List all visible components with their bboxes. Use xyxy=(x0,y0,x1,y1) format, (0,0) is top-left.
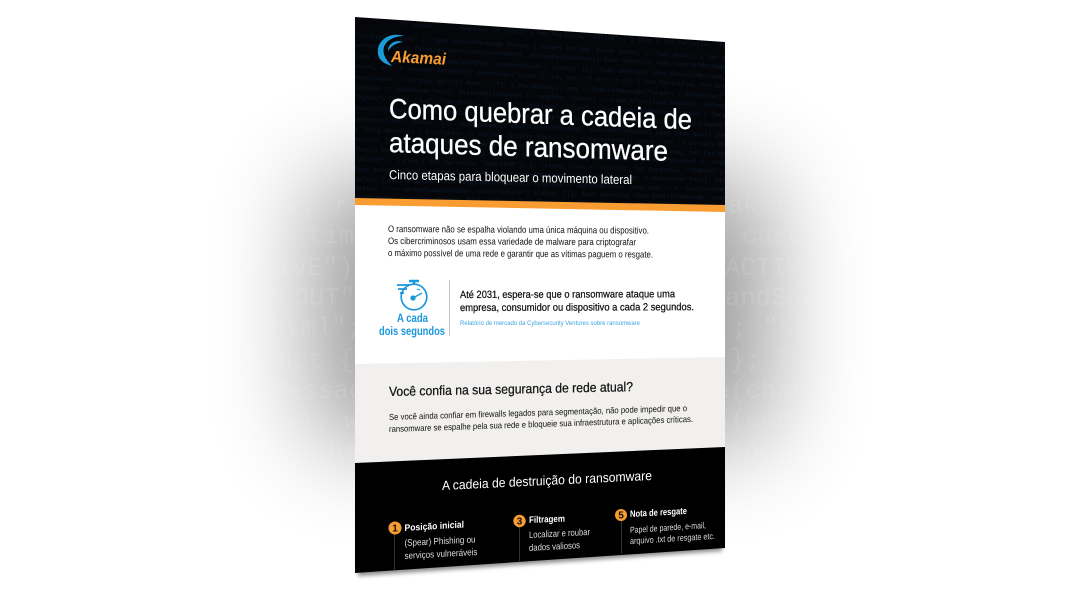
icon: stopwatch xyxy=(397,281,427,310)
background: oversized code text: andServ xyxy=(725,284,833,313)
step 1 xyxy=(388,518,478,570)
stat label: A cada xyxy=(397,312,428,325)
step 3: Filtragem xyxy=(529,513,565,525)
header code texture: "bytes"; "fmt"; "log"; "net/http"; "strconv"; "strings"; "time" ); type ControlMessage struct { Target string; Count int64; }; func main() { for { select { case respChan := xyxy=(355,94,994,132)
background: oversized code text: , r xyxy=(303,192,349,221)
background: oversized code text: Cha xyxy=(313,437,359,466)
background: oversized code text: time xyxy=(308,222,369,251)
step 3: dados valiosos xyxy=(529,539,580,553)
panel: black header xyxy=(355,17,725,206)
step 3: Localizar e roubar xyxy=(529,526,590,540)
background: oversized code text: ror xyxy=(309,161,355,190)
header code texture: hostTokens := strings.Split(r.Host, ":"); r.ParseForm(); count, err := strconv.ParseInt(r.FormValue("count"), 10, 64); if err != nil { workerActive = status; xyxy=(355,194,938,215)
background: oversized code text: CTIVE") xyxy=(246,254,354,283)
header code texture: select { case respChan := <- statusPollChannel: respChan <- workerActive; case msg := <- controlChannel: workerActive = true; go doStuff(msg, workerCompleteChan); func admin(cc ch xyxy=(355,176,1020,202)
background: oversized code text: l); w xyxy=(283,407,360,436)
stat text xyxy=(460,289,694,314)
question heading: Você confia na sua segurança de rede atual? xyxy=(389,379,633,399)
title: Como quebrar a cadeia de xyxy=(389,93,692,135)
step 5: arquivo .txt de resgate etc. xyxy=(630,531,715,546)
header code texture: count, err := strconv.ParseInt(r.FormValue("count"), 10, 64); if err != nil { fmt.Fprintf(w, err.Error()); return; }; http.HandleFunc("/status",func(w xyxy=(355,63,912,100)
header code texture: reqChan := make(chan bool); statusPollChannel <- reqChan; timeout := time.After(time.Second); select { fmt.Fprint(w, "ACTIVE"); } else { fmt.Fprint(w, "INACTIVE"); }; xyxy=(355,84,971,122)
step 3: 3 xyxy=(517,516,523,528)
panel: black kill chain section xyxy=(355,447,725,573)
background: oversized code text: e(chan xyxy=(715,377,807,406)
header code texture: if result := <- reqChan; if result { fmt.Fprint(w, "ACTIVE"); } else { fmt.Fprint(w, "INACTIVE"); }; return; xyxy=(400,21,801,54)
background: blurred shadow behind document xyxy=(315,180,767,440)
title xyxy=(389,93,692,167)
background: oversized code text: ake( xyxy=(728,192,789,221)
step 1: 1 xyxy=(392,524,398,534)
question paragraph xyxy=(389,403,693,434)
logo: Akamai xyxy=(378,35,446,69)
stat label xyxy=(379,312,445,338)
intro paragraph: o máximo possível de uma rede e garantir que as vítimas paguem o resgate. xyxy=(388,247,653,260)
panel: white intro section xyxy=(355,198,725,366)
kill chain heading: A cadeia de destruição do ransomware xyxy=(442,468,652,493)
logo: Akamai: Akamai xyxy=(390,48,446,69)
document page xyxy=(355,17,725,573)
step 1: serviços vulneráveis xyxy=(404,546,478,561)
header code texture: hostTokens := strings.Split(r.Host, ":"); r.ParseForm(); msg := ControlMessage{Target: r.FormValue("target"), Count: count}; }); http.HandleFunc("/status",func(w xyxy=(355,74,953,112)
header code texture: workerActive := false;go admin(controlChannel, statusPollChannel); func admin(cc chan ControlMessage, statusPollChannel chan chan bool) { xyxy=(355,42,864,78)
question paragraph: ransomware se espalhe pela sua rede e bloqueie sua infraestrutura e aplicações críticas. xyxy=(389,414,693,434)
background: oversized code text: Messag xyxy=(272,377,364,406)
question paragraph: Se você ainda confiar em firewalls legados para segmentação, não pode impedir que o xyxy=(389,403,687,422)
source note: Relatório de mercado da Cybersecurity Ventures sobre ransomware xyxy=(460,320,640,327)
step 5: Papel de parede, e-mail, xyxy=(630,520,706,535)
background: oversized code text: MEOUT" xyxy=(263,284,355,313)
intro paragraph: Os cibercriminosos usam essa variedade de malware para criptografar xyxy=(388,235,636,247)
header code texture: controlChannel := make(chan ControlMessage);workerCompleteChan := make(chan bool); statusPollChannel; go admin(controlChannel, statusPollChannel); for { select { case respChan xyxy=(355,105,1005,142)
background: oversized code text: case xyxy=(742,222,803,251)
header code texture: r *http.Request) { hostTokens := strings.Split(r.Host, ":"); r.ParseForm(); count, err := strconv.ParseInt(r.FormValue("count"), 10, 64); if err != nil { fmt.Fprintf(w, err.Error()); fmt.Fp xyxy=(355,126,1057,162)
step 3 xyxy=(513,513,590,561)
stat text: empresa, consumidor ou dispositivo a cada 2 segundos. xyxy=(460,302,694,314)
panel: gray question section xyxy=(355,357,725,463)
background: oversized code text: )(con xyxy=(715,407,792,436)
intro paragraph: O ransomware não se espalha violando uma única máquina ou dispositivo. xyxy=(388,223,649,236)
header code texture: case status := <- workerCompleteChan: workerActive = status; }}}; func admin(cc chan ControlMessage, statusPollChannel; if err != nil { fmt.Fprintf(w, err.Error()); return; } xyxy=(355,53,1001,96)
stat label: dois segundos xyxy=(379,325,445,338)
orange divider band xyxy=(355,198,725,212)
background: oversized code text: ACTIVE xyxy=(725,254,817,283)
step 5 xyxy=(615,505,715,554)
background: oversized code text: spC xyxy=(728,437,774,466)
background: oversized code text: }; func xyxy=(730,346,838,375)
background: oversized code text: ruct { xyxy=(262,346,354,375)
step 5: 5 xyxy=(618,510,624,522)
title: ataques de ransomware xyxy=(389,127,668,167)
document drop shadow xyxy=(358,480,722,576)
header code texture xyxy=(355,22,725,205)
header code texture: func(w http.ResponseWriter, r *http.Request) { reqChan := make(chan bool); statusPollChannel <- reqChan; timeout := time.After(time.Second); select { case result := fmt.Fprint(w, fmt.Fp xyxy=(355,146,1042,178)
step 1: Posição inicial xyxy=(404,518,464,533)
step 1: (Spear) Phishing ou xyxy=(404,533,476,548)
header code texture: return; }; msg := ControlMessage{Target: r.FormValue("target"), Count: count}; cc <- msg; fmt.Fprintf(w, "Control message issued for Target %s, count %d", count); }); http.HandleFunc xyxy=(355,136,1031,170)
header code texture: "strings"; "time" ); type ControlMessage struct { Target string; Count int64; }; func main() { for { select { case xyxy=(355,32,778,65)
intro paragraph xyxy=(388,223,653,260)
vertical divider xyxy=(449,280,450,336)
background: oversized code text: html"; xyxy=(270,314,362,343)
background: oversized code text: ; "str xyxy=(732,314,824,343)
background: oversized code text xyxy=(246,161,838,466)
step 5: Nota de resgate xyxy=(630,505,687,519)
header code texture: workerActive = status; }}}; func admin(cc chan ControlMessage, statusPollChannel chan chan bool) {http.HandleFunc("/admin", func(w, r) { func admin(cc chan ControlMessage, status xyxy=(355,116,1016,152)
subtitle: Cinco etapas para bloquear o movimento lateral xyxy=(389,167,632,187)
stat text: Até 2031, espera-se que o ransomware ataque uma xyxy=(460,289,675,301)
header code texture: "ACTIVE"); } else { fmt.Fprint(w, "INACTIVE"); }; return; case <- timeout: fmt.Fprint(w, "TIMEOUT");}}); log.Fatal(http.ListenAndServe(":1337", nil)); }; package main; import ( "fmt"; struct { xyxy=(355,156,1068,187)
